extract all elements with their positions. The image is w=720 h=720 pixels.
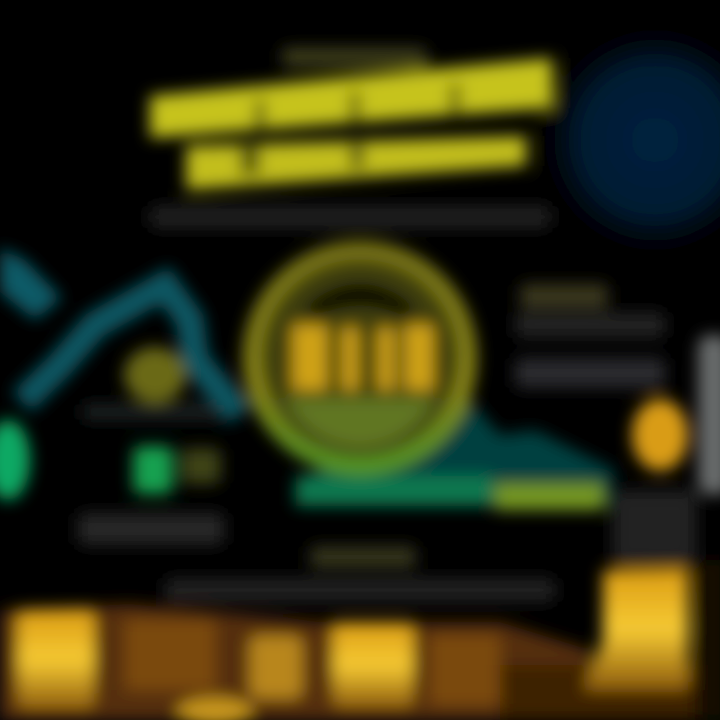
right chart: teal and green area [295,400,615,510]
emblem ring [252,250,468,466]
title line one [150,58,552,138]
right base [500,665,720,720]
subtitle text block [150,206,550,228]
icon: small gold emblem [124,347,186,403]
emblem inner disc [260,258,460,458]
panel: left statistics [78,347,224,545]
left caption [78,513,224,545]
coin base [0,604,600,720]
gold coin stacks [0,560,720,720]
title line two [186,136,526,190]
lower text [165,546,555,602]
right text line two [515,358,665,388]
coin base highlights [125,620,500,705]
icon: bottle and coin [612,335,720,565]
icon: left green marker [0,420,30,500]
gold coin [632,399,688,471]
coin stack left [18,610,94,710]
left text block [82,404,222,420]
lower paragraph [165,578,555,602]
central gold emblem [252,250,468,466]
panel: right text [515,284,665,388]
coin stack right [583,568,688,690]
title dark gaps [240,84,460,175]
left olive figure [181,448,221,484]
background glow: blue orb [530,15,720,265]
heading block [150,48,552,228]
right heading [520,284,608,308]
coin stack bottom [177,698,253,720]
emblem dark arch [310,291,410,312]
right text line one [515,312,665,338]
left green figure [133,446,173,494]
bottle body [612,490,697,565]
emblem columns [293,325,433,390]
emblem lower landscape [285,398,435,448]
coin stack bright [333,622,413,708]
coin stack mid [250,636,302,698]
bottle highlight [698,335,720,495]
lower heading [310,546,416,568]
eyebrow text block [282,48,427,66]
left chart: teal mountain lines [0,248,240,415]
dark right edge [695,560,720,720]
